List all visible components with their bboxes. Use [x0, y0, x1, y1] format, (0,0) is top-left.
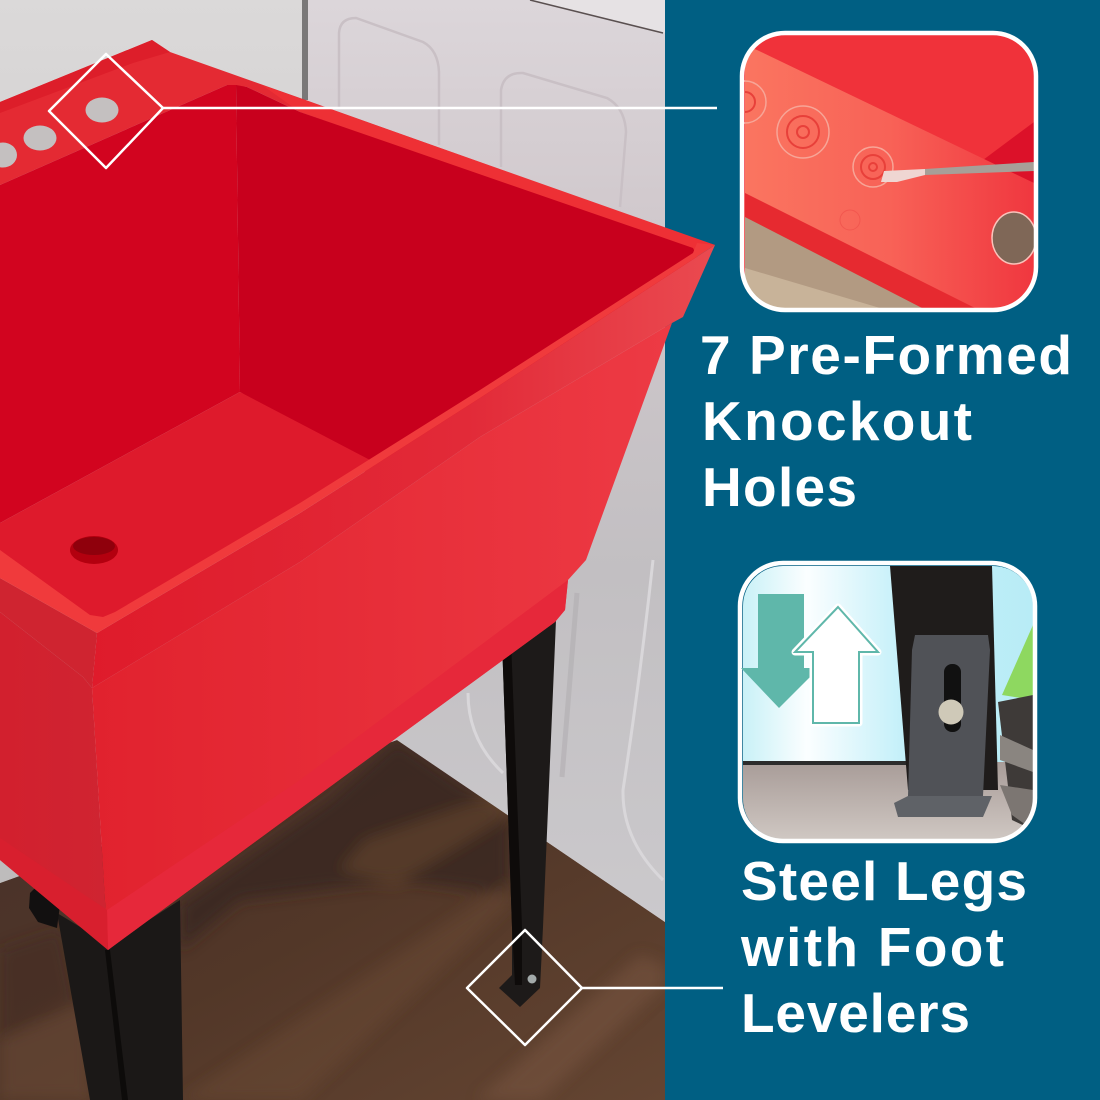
blue side panel	[665, 0, 1100, 1100]
heading: knockout holes: Knockout	[702, 390, 972, 452]
sink rim top edge	[0, 243, 715, 633]
sink left face	[0, 612, 108, 950]
heading: knockout holes: 7 Pre-Formed	[700, 324, 1072, 386]
basin right wall	[236, 85, 700, 475]
heading: steel legs	[740, 850, 1027, 1044]
callout: knockout holes marker and leader line	[49, 54, 717, 168]
heading: steel legs: with Foot	[740, 916, 1004, 978]
washing machine	[302, 0, 665, 925]
heading: knockout holes	[700, 324, 1072, 518]
thumbnail: knockout holes close-up	[724, 33, 1036, 310]
sink rim skirt	[92, 245, 715, 688]
heading: steel legs: Steel Legs	[741, 850, 1027, 912]
sink deck with faucet holes	[0, 40, 715, 252]
icon: up arrow	[795, 607, 878, 723]
heading: knockout holes: Holes	[702, 456, 857, 518]
rear left bracket	[29, 885, 60, 928]
basin left wall	[0, 85, 240, 523]
callout: foot leveler marker and leader line	[467, 930, 723, 1045]
thumbnail: foot leveler close-up	[740, 563, 1035, 841]
foot screw	[528, 974, 536, 984]
icon: down arrow	[741, 594, 819, 708]
back right leg	[499, 620, 556, 1007]
photo: red utility sink in laundry room	[0, 0, 715, 1100]
wood floor	[0, 740, 665, 1100]
drain hole	[70, 536, 118, 564]
wall	[0, 0, 310, 900]
front leg	[57, 900, 183, 1100]
sink bottom band	[107, 580, 568, 950]
sink front face	[92, 323, 672, 950]
heading: steel legs: Levelers	[741, 982, 970, 1044]
basin floor	[0, 392, 370, 620]
